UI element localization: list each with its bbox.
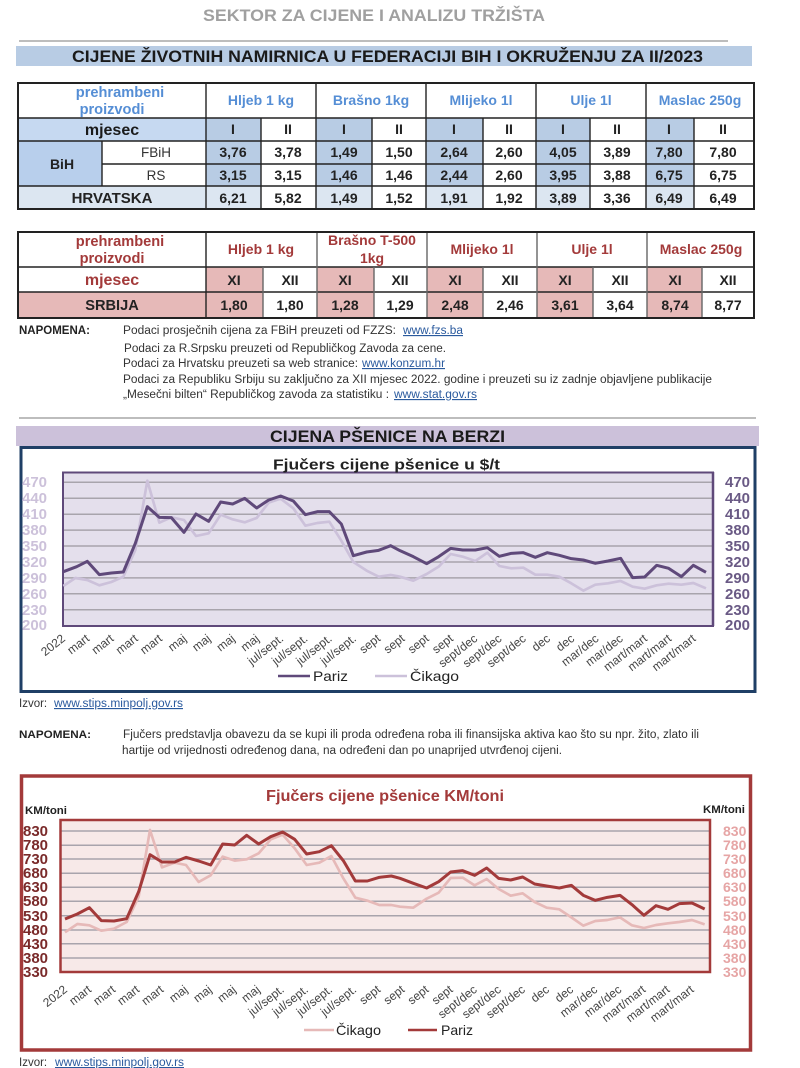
table row: month: II — [395, 121, 403, 137]
right axis labels: 410 — [725, 506, 750, 523]
table: BiH and Croatia prices — [18, 83, 754, 209]
left axis labels: 630 — [23, 879, 48, 896]
left axis labels: 830 — [23, 823, 48, 840]
source line: Izvor: — [19, 698, 47, 710]
table rows: BiH values: 1,49 — [330, 144, 358, 160]
plot area with grid — [60, 820, 710, 972]
table header: Serbia products: Maslac 250g — [660, 241, 742, 257]
left axis labels: 320 — [22, 554, 47, 571]
chart title: Fjučers cijene pšenice u $/t — [273, 456, 500, 474]
table header: products: proizvodi — [80, 102, 144, 118]
table row: Serbia month — [85, 272, 737, 289]
table header: products: Mlijeko 1l — [449, 92, 513, 108]
table row: Serbia month: XI — [448, 272, 462, 288]
x axis labels: mart — [65, 631, 93, 657]
left axis labels: 580 — [23, 893, 48, 910]
table row: Croatia: 1,91 — [440, 190, 468, 206]
table row: Serbia values: 8,74 — [661, 297, 689, 313]
table row: Serbia month: XII — [281, 272, 299, 288]
table row: Croatia: 1,49 — [330, 190, 358, 206]
note: futures definition: hartije od vrijednosti određenog dana, na određeni dan po unaprijed utvrđenoj cijeni. — [122, 745, 562, 757]
table header: products: Hljeb 1 kg — [228, 92, 294, 108]
left axis labels: 350 — [22, 538, 47, 555]
table row: Croatia: 6,49 — [655, 190, 683, 206]
table rows: BiH values: 2,60 — [495, 167, 523, 183]
table rows: BiH values: 6,75 — [655, 167, 683, 183]
table rows: BiH values: 3,15 — [274, 167, 302, 183]
table row: month — [85, 121, 727, 139]
table rows: BiH values: 1,46 — [330, 167, 358, 183]
x axis labels: mar/dec — [557, 982, 600, 1020]
table rows: BiH values: 3,95 — [549, 167, 577, 183]
right axis labels: 580 — [723, 893, 747, 909]
left axis labels: 730 — [23, 851, 48, 868]
note: futures definition: NAPOMENA: — [19, 729, 91, 741]
note: data sources: www.stat.gov.rs — [393, 389, 477, 401]
x axis labels: jul/sept. — [293, 631, 335, 668]
chart: wheat futures USD per ton — [21, 448, 755, 692]
x axis labels: sept/dec — [483, 982, 528, 1021]
heading: food prices band: CIJENE ŽIVOTNIH NAMIRNICA U FEDERACIJI BIH I OKRUŽENJU ZA II/2023 — [72, 47, 703, 66]
note: data sources: Podaci za R.Srpsku preuzeti od Republičkog Zavoda za cene. — [124, 343, 446, 355]
table rows: BiH values: 2,60 — [495, 144, 523, 160]
x axis labels: maj — [239, 982, 263, 1005]
table row: month: I — [561, 121, 565, 137]
table row: Serbia values: 3,64 — [606, 297, 634, 313]
table row: Serbia values: 1,80 — [276, 297, 304, 313]
x axis labels: mart — [137, 631, 165, 657]
table row: month: II — [505, 121, 513, 137]
x axis labels: mart/mart — [649, 631, 699, 674]
table row: month: mjesec — [85, 122, 139, 139]
table rows: BiH values: 3,88 — [603, 167, 631, 183]
note: data sources: www.konzum.hr — [361, 358, 445, 370]
left axis labels: 780 — [23, 837, 48, 854]
line: Paris — [63, 496, 706, 578]
x axis labels: mart/mart — [599, 982, 649, 1025]
table row: Serbia month: XI — [668, 272, 682, 288]
table header: products: prehrambeni — [76, 85, 164, 101]
table row: Croatia — [72, 190, 737, 207]
table row: Serbia values — [85, 297, 742, 314]
right axis labels: 320 — [725, 554, 750, 571]
x axis labels: dec — [529, 631, 553, 654]
table rows: BiH values: 2,44 — [440, 167, 468, 183]
x axis labels: mar/dec — [559, 631, 601, 669]
right axis labels: 380 — [725, 522, 750, 539]
table row: month: II — [613, 121, 621, 137]
x axis labels: maj — [215, 982, 239, 1005]
table header: Serbia products: Ulje 1l — [571, 241, 613, 257]
right axis labels — [725, 474, 750, 634]
note: data sources: Podaci za Republiku Srbiju su zaključno za XII mjesec 2022. godine i preuzeti su iz zadnje objavljene publikacije — [123, 374, 712, 386]
right axis labels: 780 — [723, 837, 747, 853]
table rows: BiH values: 6,75 — [709, 167, 737, 183]
x axis labels: mart/mart — [647, 982, 697, 1025]
right axis labels: 480 — [723, 922, 747, 938]
table header: Serbia products — [76, 232, 742, 267]
table: Serbia prices — [18, 232, 754, 318]
right axis labels: 830 — [723, 823, 747, 839]
table row: Serbia values: 2,46 — [496, 297, 524, 313]
table header: Serbia products: Hljeb 1 kg — [228, 241, 294, 257]
table rows: BiH values: 1,46 — [385, 167, 413, 183]
table rows: BiH values: RS — [147, 168, 165, 183]
table header: Serbia products: Brašno T-500 — [328, 232, 416, 248]
table rows: BiH values: 1,50 — [385, 144, 413, 160]
right axis labels: 530 — [723, 908, 747, 924]
x axis labels: maj — [191, 982, 214, 1005]
x axis labels: sept — [405, 631, 432, 656]
table row: Croatia: 3,36 — [603, 190, 631, 206]
left axis labels: 470 — [22, 474, 47, 491]
x axis labels: maj — [166, 982, 190, 1005]
table rows: BiH values: 4,05 — [549, 144, 577, 160]
legend: Pariz — [441, 1022, 473, 1038]
x axis labels: maj — [189, 631, 213, 654]
note: data sources: Podaci za Hrvatsku preuzeti sa web stranice: — [123, 358, 358, 370]
x axis labels: jul/sept. — [244, 631, 286, 668]
table row: Serbia values: 2,48 — [441, 297, 469, 313]
x axis labels: 2022 — [40, 982, 70, 1010]
table row: Croatia: HRVATSKA — [72, 190, 153, 207]
x axis labels — [40, 982, 697, 1025]
right axis labels: 260 — [725, 586, 750, 603]
x axis labels: 2022 — [38, 631, 68, 659]
x axis labels: maj — [238, 631, 262, 654]
x axis labels: maj — [165, 631, 189, 654]
table header: products: Ulje 1l — [570, 92, 612, 108]
source line: www.stips.minpolj.gov.rs — [53, 698, 183, 710]
heading: wheat price band — [16, 426, 759, 446]
heading: wheat price band: CIJENA PŠENICE NA BERZI — [270, 427, 505, 446]
x axis labels: mar/dec — [581, 982, 624, 1020]
x axis labels: dec — [553, 631, 577, 654]
x axis labels: sept/dec — [484, 631, 529, 670]
table row: Serbia month: XI — [558, 272, 572, 288]
table row: Serbia values: 1,28 — [331, 297, 359, 313]
right axis labels: 430 — [723, 936, 747, 952]
table row: Croatia: 6,49 — [709, 190, 737, 206]
table row: Croatia: 1,92 — [495, 190, 523, 206]
left axis labels: 290 — [22, 570, 47, 587]
table row: Serbia month: XII — [501, 272, 519, 288]
table header: products: Maslac 250g — [659, 92, 741, 108]
chart title: Fjučers cijene pšenice KM/toni — [266, 788, 504, 805]
table rows: BiH values: 2,64 — [440, 144, 468, 160]
table row: month: I — [231, 121, 235, 137]
note: futures definition — [19, 729, 699, 757]
legend: Pariz — [313, 668, 348, 684]
right axis labels: 330 — [723, 964, 747, 980]
left axis labels: 380 — [23, 950, 48, 967]
x axis labels: dec — [528, 982, 552, 1005]
table row: month: I — [667, 121, 671, 137]
left axis labels: 480 — [23, 922, 48, 939]
left axis labels: 230 — [22, 602, 47, 619]
line: Paris — [65, 832, 705, 921]
x axis labels: sept — [429, 982, 456, 1007]
x axis labels: jul/sept. — [268, 631, 310, 668]
left axis labels: 430 — [23, 936, 48, 953]
table header: products — [76, 85, 741, 118]
right axis labels: 290 — [725, 570, 750, 587]
x axis labels: mart — [89, 631, 117, 657]
left axis labels: 410 — [22, 506, 47, 523]
note: data sources: NAPOMENA: — [19, 325, 90, 337]
x axis labels: sept — [381, 982, 408, 1007]
left axis labels: 380 — [22, 522, 47, 539]
left axis labels — [22, 474, 47, 634]
legend — [278, 668, 459, 684]
left axis labels: 680 — [23, 865, 48, 882]
right axis labels: 680 — [723, 865, 747, 881]
x axis labels: mart/mart — [625, 631, 675, 674]
x axis labels: mart — [115, 982, 143, 1008]
left axis labels: 330 — [23, 964, 48, 981]
table row: Serbia values: 8,77 — [714, 297, 742, 313]
x axis labels: sept — [381, 631, 408, 656]
note: data sources: „Mesečni bilten“ Republičkog zavoda za statistiku : — [123, 389, 389, 401]
table header: Serbia products: Mlijeko 1l — [450, 241, 514, 257]
x axis labels: jul/sept. — [317, 631, 359, 668]
note: futures definition: Fjučers predstavlja obavezu da se kupi ili proda određena roba ili finansijska aktiva kao što su npr. žito, zlato ili — [123, 729, 699, 741]
x axis labels: sept/dec — [435, 982, 480, 1021]
chart: wheat futures KM per ton — [22, 776, 750, 1050]
table header: Serbia products: prehrambeni — [76, 234, 164, 250]
table row: month: II — [284, 121, 292, 137]
right axis labels: 230 — [725, 602, 750, 619]
left unit label: KM/toni — [25, 805, 67, 817]
left axis labels: 530 — [23, 908, 48, 925]
table row: Serbia month: XI — [227, 272, 241, 288]
x axis labels: dec — [552, 982, 576, 1005]
right axis labels: 730 — [723, 851, 747, 867]
x axis labels: jul/sept. — [245, 982, 287, 1019]
table row: Serbia values: 1,80 — [220, 297, 248, 313]
table row: Croatia: 3,89 — [549, 190, 577, 206]
table rows: BiH values: 3,78 — [274, 144, 302, 160]
x axis labels: mart — [66, 982, 94, 1008]
right axis labels: 440 — [725, 490, 750, 507]
table rows: BiH values: 7,80 — [655, 144, 683, 160]
table row: Serbia month: XII — [611, 272, 629, 288]
x axis labels: sept — [429, 631, 456, 656]
table row: Serbia month: XII — [719, 272, 737, 288]
note: data sources: Podaci prosječnih cijena za FBiH preuzeti od FZZS: — [123, 325, 396, 337]
right axis labels: 380 — [723, 950, 747, 966]
right axis labels: 200 — [725, 617, 750, 634]
table row: Serbia values: SRBIJA — [85, 298, 139, 314]
x axis labels: sept/dec — [436, 631, 480, 670]
legend: Čikago — [410, 668, 459, 684]
table header: Serbia products: proizvodi — [80, 251, 144, 267]
table header: Serbia products: 1kg — [360, 250, 384, 266]
x axis labels: mart — [91, 982, 119, 1008]
table rows: BiH values: 3,76 — [219, 144, 247, 160]
x axis labels: sept — [405, 982, 432, 1007]
left axis labels: 200 — [22, 617, 47, 634]
table row: Serbia month: XII — [391, 272, 409, 288]
x axis labels: sept — [357, 631, 384, 656]
x axis labels: mart — [113, 631, 141, 657]
table row: Serbia values: 1,29 — [386, 297, 414, 313]
right axis labels — [723, 823, 747, 980]
table rows: BiH values — [50, 144, 737, 183]
line: Chicago — [65, 830, 705, 932]
table row: month: I — [342, 121, 346, 137]
table rows: BiH values: 3,15 — [219, 167, 247, 183]
x axis labels: sept/dec — [460, 631, 504, 670]
table rows: BiH values: 7,80 — [709, 144, 737, 160]
table rows: BiH values: BiH — [50, 156, 74, 172]
x axis labels: jul/sept. — [293, 982, 335, 1019]
note: data sources — [19, 325, 712, 401]
table header: products: Brašno 1kg — [333, 92, 409, 108]
table row: Serbia values: 3,61 — [551, 297, 579, 313]
table row: Croatia: 5,82 — [274, 190, 302, 206]
table row: Croatia: 6,21 — [219, 190, 247, 206]
x axis labels: maj — [214, 631, 238, 654]
line: Chicago — [63, 481, 706, 591]
x axis labels: mart — [139, 982, 167, 1008]
x axis labels: jul/sept. — [269, 982, 311, 1019]
table rows: BiH values: FBiH — [141, 145, 171, 160]
x axis labels: sept/dec — [459, 982, 504, 1021]
table row: Croatia: 1,52 — [385, 190, 413, 206]
table row: Serbia month: mjesec — [85, 272, 139, 289]
x axis labels: mar/dec — [583, 631, 626, 669]
right axis labels: 470 — [725, 474, 750, 491]
left axis labels: 440 — [22, 490, 47, 507]
table rows: BiH values: 3,89 — [603, 144, 631, 160]
note: data sources: www.fzs.ba — [402, 325, 464, 337]
left axis labels — [23, 823, 48, 981]
title: sektor: SEKTOR ZA CIJENE I ANALIZU TRŽIŠTA — [203, 6, 545, 25]
table row: month: II — [719, 121, 727, 137]
x axis labels — [38, 631, 699, 674]
right axis labels: 630 — [723, 879, 747, 895]
legend: Čikago — [336, 1022, 381, 1038]
table row: month: I — [452, 121, 456, 137]
left axis labels: 260 — [22, 586, 47, 603]
right axis labels: 350 — [725, 538, 750, 555]
right unit label: KM/toni — [703, 804, 745, 816]
plot area with grid — [63, 472, 713, 626]
table row: Serbia month: XI — [338, 272, 352, 288]
x axis labels: mart/mart — [601, 631, 650, 674]
x axis labels: mart/mart — [623, 982, 673, 1025]
x axis labels: jul/sept. — [317, 982, 359, 1019]
legend — [304, 1022, 473, 1038]
x axis labels: sept — [357, 982, 384, 1007]
